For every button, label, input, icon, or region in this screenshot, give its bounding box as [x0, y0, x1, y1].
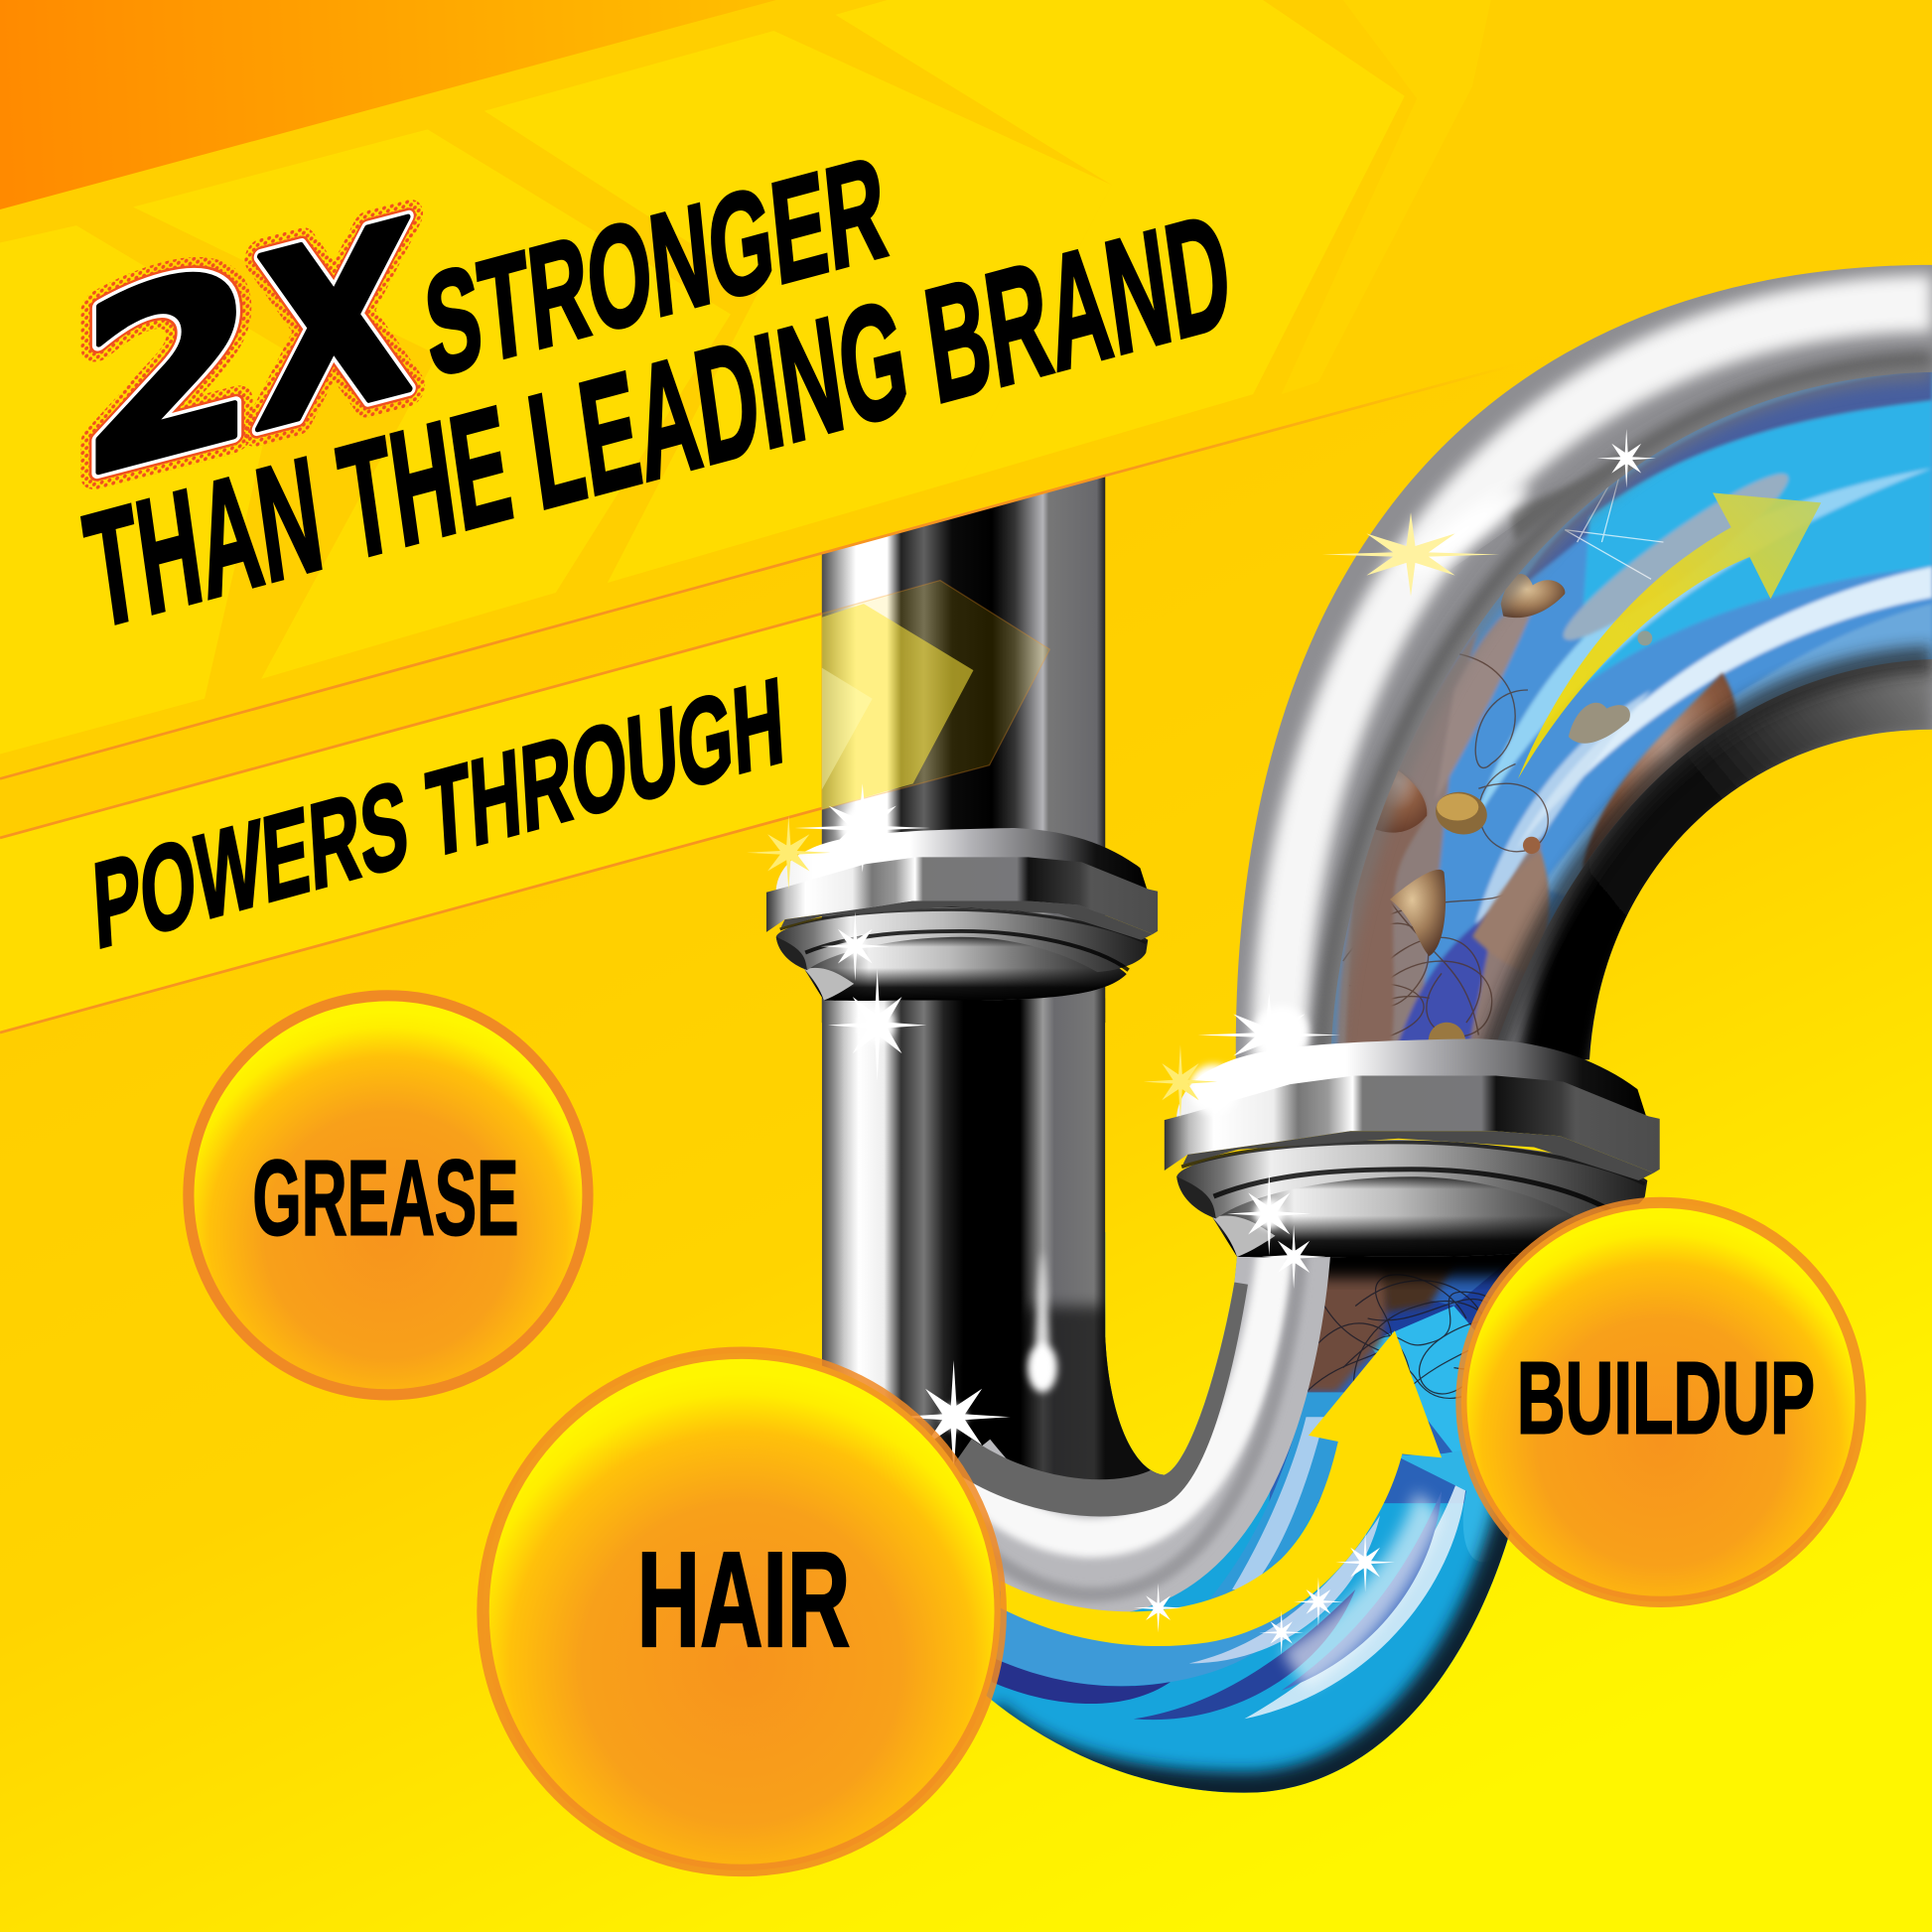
rim shadow [992, 1505, 1509, 1793]
water base [987, 1232, 1508, 1793]
logo orange outline [78, 170, 414, 533]
upper flange fitting [766, 828, 1158, 1001]
upper contents: hair and buildup [1269, 1253, 1529, 1503]
subheading: powers through: POWERS THROUGH [89, 652, 787, 975]
logo halftone halo: 2 [78, 211, 256, 533]
logo white outline [78, 170, 414, 533]
pipe rim and highlight [1279, 303, 1932, 1084]
arrow: translucent flow arrow [1518, 492, 1821, 778]
panel: top chevron band [0, 0, 1932, 778]
upper vertical pipe [822, 475, 1105, 863]
metal shell [949, 1232, 1302, 1594]
callout: grease [189, 996, 588, 1395]
logo black letters: X [254, 170, 414, 486]
rust deposits [1345, 574, 1736, 1066]
inner window: flow contents [1318, 357, 1932, 1072]
logo white outline: X [254, 170, 414, 486]
lower flange fitting [1165, 1038, 1660, 1257]
soft edges over window [1330, 372, 1932, 1072]
logo black letters [78, 170, 414, 533]
arrow: chevron overlay on pipe [822, 581, 1049, 809]
curved right pipe [1236, 265, 1932, 1084]
logo halftone halo: X [254, 170, 414, 486]
logo: 2X badge [78, 170, 414, 533]
buildup: hair strands [1343, 653, 1548, 1036]
P-trap lower bend [822, 999, 1529, 1793]
upper pipe lower section [822, 863, 1105, 1023]
ribbon edge lines [0, 364, 1516, 1033]
corner: orange wedge [0, 0, 776, 209]
callout: hair [483, 1353, 1001, 1870]
highlights [1509, 459, 1626, 542]
sparkle lines [1565, 479, 1664, 580]
arrow: yellow flow arrow [1001, 1330, 1442, 1646]
callout: buildup [1461, 1202, 1861, 1601]
logo orange outline: X [254, 170, 414, 486]
chevron pattern [0, 0, 1491, 755]
lower vertical pipe [822, 999, 1174, 1479]
icon: water drip highlight [1028, 1251, 1057, 1392]
callout: hair: HAIR [637, 1523, 850, 1675]
heading: stronger: STRONGER [418, 126, 893, 408]
logo white outline: 2 [78, 211, 256, 533]
logo orange outline: 2 [78, 211, 256, 533]
logo black letters: 2 [78, 211, 256, 533]
callout: grease: GREASE [252, 1138, 518, 1258]
sparkles [747, 429, 1656, 1655]
water sparkle highlights [1282, 1491, 1442, 1688]
logo halftone halo [78, 170, 414, 533]
water ribbons [992, 1392, 1528, 1720]
panel: powers through ribbon [0, 614, 822, 1033]
